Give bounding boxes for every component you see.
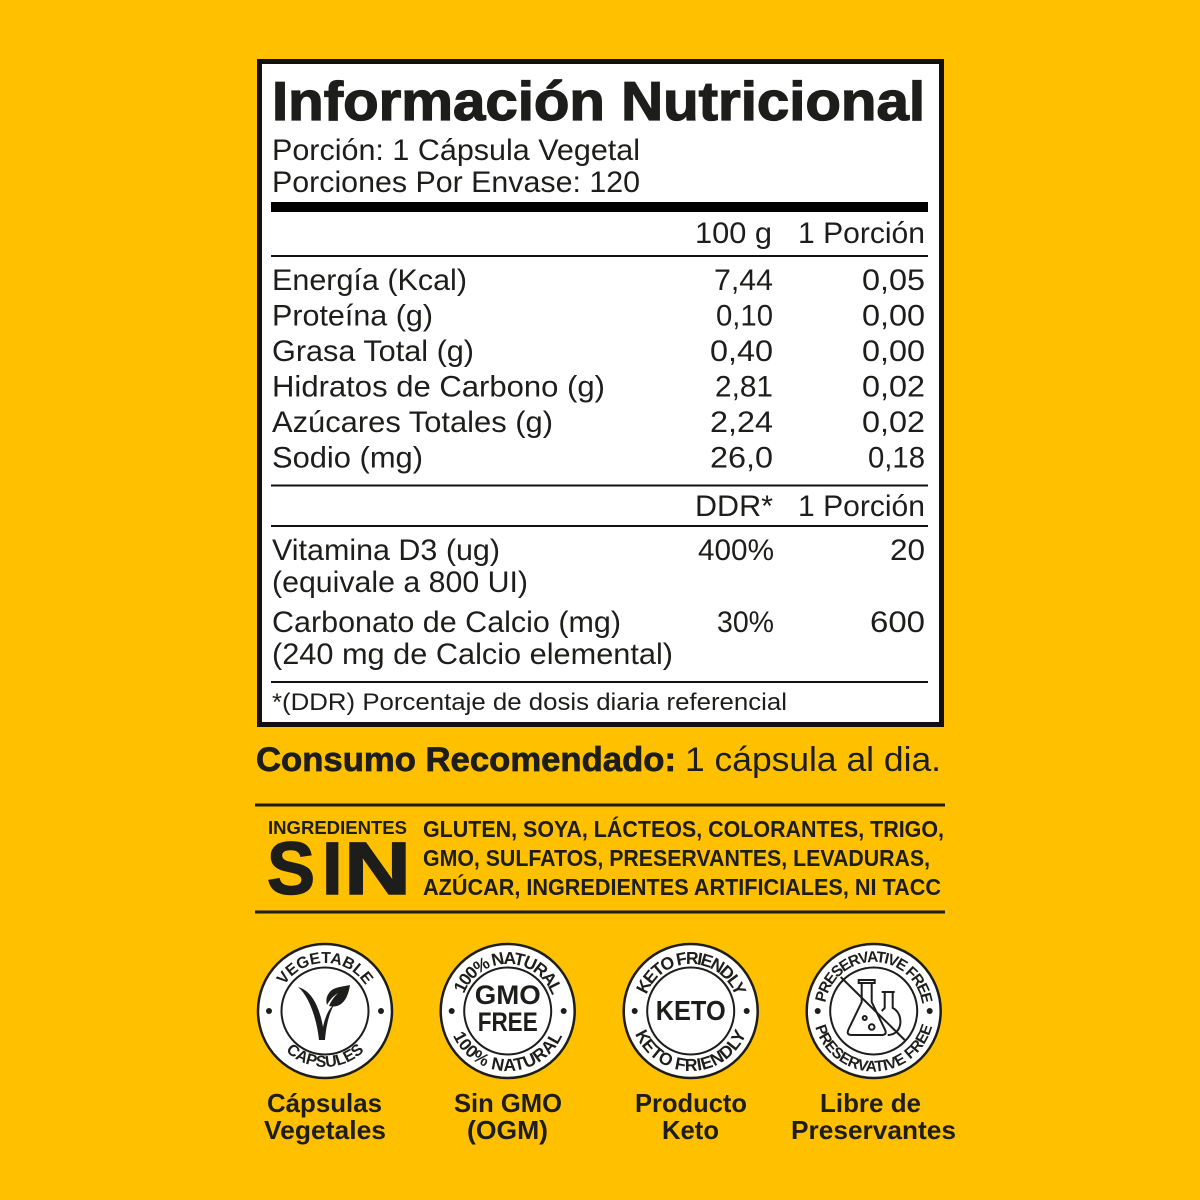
free-from heading: N bbox=[344, 827, 411, 910]
table rows: nutrients: Azúcares Totales (g) bbox=[272, 406, 553, 439]
badge: GMO free: 100% NATURAL bbox=[454, 952, 560, 995]
serving information: Porción: 1 Cápsula Vegetal bbox=[272, 134, 640, 167]
badge: vegetable capsules: CAPSULES bbox=[288, 1044, 363, 1067]
free-from heading bbox=[267, 817, 411, 910]
table rows: nutrients: 0,02 bbox=[862, 370, 925, 404]
table rows: vitamins and minerals: Vitamina D3 (ug) bbox=[272, 534, 500, 567]
badge: keto friendly: KETO bbox=[656, 995, 726, 1026]
badge: preservative free: PRESERVATIVE FREE bbox=[815, 951, 933, 1004]
badge labels: Producto bbox=[635, 1088, 747, 1118]
table rows: nutrients: Hidratos de Carbono (g) bbox=[272, 370, 605, 404]
badge labels: Preservantes bbox=[791, 1115, 956, 1145]
table rows: nutrients: 0,05 bbox=[862, 264, 925, 297]
table rows: nutrients: Sodio (mg) bbox=[272, 442, 423, 474]
badge labels: Keto bbox=[662, 1115, 719, 1145]
table rows: nutrients: 26,0 bbox=[710, 442, 773, 474]
table rows: vitamins and minerals: 20 bbox=[890, 534, 925, 567]
table header: DDR and per serving bbox=[695, 490, 925, 523]
badge labels: Sin GMO bbox=[454, 1088, 562, 1118]
panel: nutrition facts bbox=[260, 62, 942, 724]
table header: DDR and per serving: DDR* bbox=[695, 490, 773, 523]
badge labels: (OGM) bbox=[467, 1115, 548, 1145]
table rows: nutrients: Grasa Total (g) bbox=[272, 335, 474, 368]
table rows: nutrients: 0,10 bbox=[716, 300, 773, 332]
table rows: nutrients: 0,02 bbox=[862, 406, 925, 439]
free-from heading: I bbox=[322, 827, 343, 910]
footnote: *(DDR) Porcentaje de dosis diaria referencial bbox=[272, 689, 787, 716]
table rows: nutrients bbox=[272, 264, 925, 474]
table rows: vitamins and minerals: (equivale a 800 UI) bbox=[272, 566, 528, 599]
title: Información Nutricional bbox=[272, 70, 925, 132]
table rows: vitamins and minerals: 600 bbox=[870, 606, 925, 639]
icon: V with leaf bbox=[298, 985, 350, 1040]
badge: keto friendly: KETO FRIENDLY bbox=[636, 952, 746, 994]
badge: GMO free: GMO bbox=[475, 980, 541, 1010]
table rows: nutrients: Energía (Kcal) bbox=[272, 264, 467, 297]
badge labels bbox=[264, 1088, 956, 1145]
table rows: nutrients: 0,00 bbox=[862, 335, 925, 368]
table header: DDR and per serving: 1 Porción bbox=[798, 490, 925, 523]
table header: per 100 g and per serving: 100 g bbox=[695, 217, 772, 250]
table rows: nutrients: 2,24 bbox=[710, 406, 773, 439]
table header: per 100 g and per serving: 1 Porción bbox=[798, 217, 925, 250]
serving information: Porciones Por Envase: 120 bbox=[272, 166, 640, 199]
badge labels: Cápsulas bbox=[267, 1088, 382, 1118]
free-from list: GLUTEN, SOYA, LÁCTEOS, COLORANTES, TRIGO, bbox=[423, 815, 944, 842]
recommended consumption: 1 cápsula al dia. bbox=[685, 741, 941, 779]
badge labels: Vegetales bbox=[264, 1115, 386, 1145]
table rows: vitamins and minerals bbox=[272, 534, 925, 671]
badge: keto friendly: KETO FRIENDLY bbox=[636, 1028, 744, 1071]
table header: per 100 g and per serving bbox=[695, 217, 925, 250]
recommended consumption: Consumo Recomendado: bbox=[256, 741, 676, 779]
free-from list bbox=[423, 815, 944, 900]
table rows: nutrients: 7,44 bbox=[714, 264, 773, 297]
table rows: nutrients: 2,81 bbox=[715, 370, 773, 404]
table rows: vitamins and minerals: 400% bbox=[698, 534, 774, 567]
badge: preservative free: PRESERVATIVE FREE bbox=[816, 1024, 932, 1072]
free-from list: AZÚCAR, INGREDIENTES ARTIFICIALES, NI TACC bbox=[423, 873, 941, 900]
table rows: nutrients: 0,40 bbox=[710, 335, 773, 368]
badge: keto friendly bbox=[622, 942, 759, 1080]
recommended consumption bbox=[256, 741, 941, 779]
table rows: vitamins and minerals: (240 mg de Calcio elemental) bbox=[272, 638, 673, 671]
table rows: vitamins and minerals: Carbonato de Calcio (mg) bbox=[272, 606, 621, 639]
table rows: nutrients: Proteína (g) bbox=[272, 300, 433, 332]
free-from heading: INGREDIENTES bbox=[268, 817, 407, 838]
icon: crossed-out flasks bbox=[841, 977, 905, 1040]
free-from list: GMO, SULFATOS, PRESERVANTES, LEVADURAS, bbox=[423, 845, 930, 871]
badge: vegetable capsules: VEGETABLE bbox=[276, 952, 374, 985]
table rows: nutrients: 0,00 bbox=[862, 300, 925, 332]
badge labels: Libre de bbox=[820, 1088, 921, 1118]
table rows: nutrients: 0,18 bbox=[868, 442, 925, 474]
table rows: vitamins and minerals: 30% bbox=[717, 606, 774, 639]
free-from ingredients block bbox=[267, 815, 944, 910]
badge: vegetable capsules bbox=[256, 942, 394, 1080]
badge: GMO free bbox=[439, 942, 576, 1080]
badge: preservative free bbox=[805, 942, 942, 1080]
serving information bbox=[272, 134, 640, 199]
free-from heading: S bbox=[267, 827, 315, 910]
badge: GMO free: FREE bbox=[478, 1007, 538, 1037]
badge: GMO free: 100% NATURAL bbox=[453, 1032, 562, 1072]
